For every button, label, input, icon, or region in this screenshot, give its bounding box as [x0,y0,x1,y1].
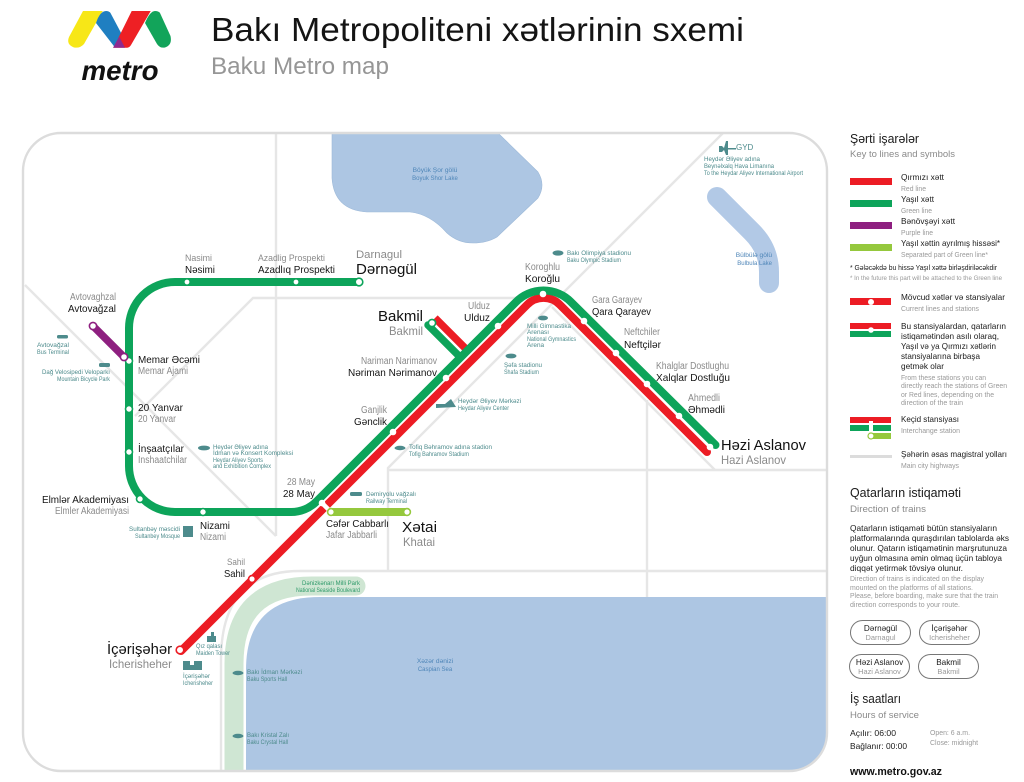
legend: main city highways [850,450,1007,470]
direction pill: Icherisheher: İçərişəhər [932,623,968,633]
landmark: Baku Sports Hall: Baku Sports Hall [247,676,287,683]
legend: green line: Yaşıl xətt [901,195,935,204]
legend: purple line: Purple line [901,228,933,237]
stations [89,278,713,654]
station: Bakmil: Bakmil [378,308,423,325]
legend: direct stations: From these stations you can [901,373,986,382]
landmark: Bus Terminal: Avtovağzal [37,342,69,349]
legend: current lines and stations: Current lines and stations [901,304,979,313]
legend: direct stations: istiqamətindən asılı olaraq, [901,332,999,341]
legend: current lines and stations [850,293,1005,313]
legend: main city highways: Şəhərin əsas magistral yolları [901,450,1007,459]
station: Ulduz: Ulduz [464,312,490,324]
landmark: Heydar Aliyev Center [436,398,521,412]
landmark: Maiden Tower: Qız qalası [196,643,222,650]
landmark: Railway Terminal: Dəmiryolu vağzalı [366,491,416,498]
landmark: Baku Crystal Hall [232,732,289,746]
direction text: Azerbaijani [850,524,1009,573]
direction pill: Icherisheher: Icherisheher [929,633,970,642]
station: 20 Yanvar [138,402,183,425]
line: red Bakmil branch [435,318,468,351]
station: Khalglar Dostlughu [656,361,730,384]
landmark: Bulbula lake label [736,252,773,267]
station: 28 May: 28 May [283,488,316,500]
line: purple [93,326,125,358]
logo: Baku Metro: metro [82,55,158,86]
hours heading: İş saatları [850,691,901,706]
legend: red line: Qırmızı xətt [901,173,945,182]
park: National Seaside Boulevard [234,586,356,782]
landmark: Sports and Exhibition Complex: Heydər Əliyev adına [213,444,268,451]
landmark: Railway Terminal [350,491,416,505]
station: Ganjlik: Gənclik [354,416,388,428]
landmark: Tofig Bahramov Stadium: Tofig Bahramov Stadium [409,451,469,458]
station: Memar Ajami: Memar Ajami [138,366,188,377]
station: Elmler Akademiyasi [42,494,129,517]
city highways [25,133,830,775]
website: www.metro.gov.az [849,766,942,778]
map frame [23,133,827,771]
station: Koroglu: Koroghlu [525,262,560,273]
landmark: Bulbula lake label: Bulbula Lake [737,261,773,267]
station: Khatai: Khatai [403,535,435,549]
direction text: English [850,574,998,609]
landmark: Sports and Exhibition Complex: and Exhibition Complex [213,463,272,470]
station: Avtovagzal: Avtovağzal [68,303,116,315]
legend: current lines and stations: Mövcud xətlər və stansiyalar [901,293,1005,302]
landmark: Boyuk Shor lake label: Boyuk Shor Lake [412,176,459,182]
landmark: airport: GYD [736,143,754,152]
hours: Azerbaijani: Açılır: 06:00 [850,729,896,738]
station: Khatai: Xətai [402,519,437,536]
Caspian Sea label [417,658,454,673]
landmark: Mountain Bicycle Park: Dağ Velosipedi Veloparkı [42,369,110,376]
direction heading: Direction of trains [850,504,926,515]
landmark: Baku Crystal Hall: Baku Crystal Hall [247,739,288,746]
landmark: Icherisheher old city: İçərişəhər [183,671,211,680]
logo: Baku Metro [68,11,171,86]
legend: red line [850,173,945,193]
station: Elmler Akademiyasi: Elmler Akademiyasi [55,506,129,517]
landmark: Maiden Tower [196,632,231,657]
landmark: Sultanbey Mosque: Sultanbəy məscidi [129,526,180,533]
legend: footnote: * Gələcəkdə bu hissə Yaşıl xəttə birləşdiriləcəkdir [850,263,998,272]
station: Koroglu [525,262,560,285]
station: Icherisheher: Icherisheher [109,657,172,671]
landmark: Sports and Exhibition Complex [198,444,293,470]
station: Jafar Jabbarli [326,518,389,541]
station: Gara Garayev: Qara Qarayev [592,306,652,318]
direction text: English: mounted on the platforms of all stations. [850,583,973,592]
landmark: Icherisheher old city: Icherisheher [183,680,214,687]
landmark: airport: Heydər Əliyev adına [704,156,760,163]
landmark: Sports and Exhibition Complex: İdman və Konsert Kompleksi [213,448,293,457]
legend: direct stations: stansiyalarına birbaşa [901,352,980,361]
landmark: Heydar Aliyev Center: Heydər Əliyev Mərkəzi [458,398,521,405]
station: Avtovagzal [68,292,116,315]
station: Icherisheher [107,640,172,671]
legend: separated green line: Separated part of Green line* [901,250,988,259]
landmark: Tofig Bahramov Stadium: Tofiq Bəhramov adına stadion [409,444,492,451]
park label: Dənizkənarı Milli Park [302,580,361,587]
station: Nizami: Nizami [200,520,230,532]
station: Neftchiler: Neftçilər [624,339,661,351]
legend: purple line: Bənövşəyi xətt [901,217,956,226]
legend: direct stations: or Red lines, depending on the [901,390,994,399]
station: Memar Ajami [138,354,200,377]
station: Nesimi: Nəsimi [185,264,215,276]
legend: direct stations: Yaşıl və ya Qırmızı xətlərin [901,342,996,351]
station: Dernegul: Dərnəgül [356,261,417,278]
station: Memar Ajami: Memar Əcəmi [138,354,200,366]
landmark: Shafa Stadium: Shafa Stadium [504,369,539,376]
hours: English: Close: midnight [930,738,978,747]
landmark: Sultanbey Mosque [129,526,193,540]
legend: green line: Green line [901,206,932,215]
station: Azadliq Prospekti [258,253,335,276]
direction heading: Qatarların istiqaməti [850,485,961,500]
direction heading [850,485,961,515]
station: Nariman Narimanov: Nariman Narimanov [361,356,437,367]
hours heading [850,691,919,721]
station: Azadliq Prospekti: Azadlig Prospekti [258,253,325,263]
direction pill: Dernegul: Dərnəgül [864,624,897,633]
panel: hours of service [849,691,978,778]
sea: Caspian [246,597,840,782]
legend heading [850,131,955,160]
station: Nesimi: Nasimi [185,253,212,263]
direction text: English: direction corresponds to your route. [850,600,960,609]
station: Koroglu: Koroğlu [525,273,560,285]
line: green main [129,282,716,512]
landmark: Baku Sports Hall: Bakı İdman Mərkəzi [247,667,302,676]
legend: interchange station: Interchange station [901,426,960,435]
landmark: Railway Terminal: Railway Terminal [366,498,407,505]
landmark: airport [704,141,803,177]
station: 20 Yanvar: 20 Yanvar [138,414,177,425]
landmark: Boyuk Shor lake label [412,167,459,182]
panel: direction of trains [850,485,1009,678]
station: Gara Garayev: Gara Garayev [592,295,642,306]
landmark: National Gymnastics Arena [527,316,576,349]
lake: Bulbula [717,197,769,283]
landmark: Shafa Stadium [504,354,542,376]
station: Neftchiler [624,327,661,351]
station: Nariman Narimanov [348,356,438,379]
panel: legend [850,131,1007,470]
landmark: Bus Terminal [37,335,69,356]
direction pill: Bakmil [918,654,978,678]
hours: English: Open: 6 a.m. [930,728,970,737]
landmark: Mountain Bicycle Park: Mountain Bicycle Park [57,376,111,383]
legend: green line [850,195,935,215]
station: Gara Garayev [592,295,652,318]
landmark: Bus Terminal: Bus Terminal [37,349,69,356]
hours: Azerbaijani: Bağlanır: 00:00 [850,742,907,751]
station: Ganjlik: Ganjlik [361,405,388,416]
direction text: English: Please, before boarding, make sure that the train [850,591,998,600]
landmark: Tofig Bahramov Stadium [394,444,492,458]
station: 28 May [283,477,316,500]
legend: direct stations: Bu stansiyalardan, qatarların [901,322,1006,331]
hours: Azerbaijani [850,729,907,751]
station: Dernegul [356,249,417,278]
station: Inshaatchilar [138,442,188,466]
legend: interchange station: Keçid stansiyası [901,415,959,424]
landmark: Sports and Exhibition Complex: Heydar Aliyev Sports [213,457,263,464]
legend: direct stations: getmək olar [901,362,944,371]
station: Nizami [200,520,230,543]
landmark: Sultanbey Mosque: Sultanbey Mosque [135,533,180,540]
landmark: Baku Olympic Stadium: Bakı Olimpiya stadionu [567,250,631,257]
direction text: Azerbaijani: platformalarında quraşdırılan tablolarda əks [850,534,1009,543]
station: Avtovagzal: Avtovaghzal [70,292,116,303]
legend: separated green line [850,239,1001,259]
station: Dernegul: Darnagul [356,249,402,261]
station: Sahil: Sahil [224,568,245,580]
station: Ahmedli: Əhmədli [688,404,725,416]
station: Khatai [402,519,437,549]
legend: separated green line: Yaşıl xəttin ayrılmış hissəsi* [901,239,1001,248]
station: 20 Yanvar: 20 Yanvar [138,402,183,414]
station: Nariman Narimanov: Nəriman Nərimanov [348,367,438,379]
landmark: Mountain Bicycle Park [42,363,111,383]
park label [296,580,361,594]
landmark: Baku Olympic Stadium [552,250,631,264]
landmark: Boyuk Shor lake label: Böyük Şor gölü [413,167,458,174]
station: Elmler Akademiyasi: Elmlər Akademiyası [42,494,129,506]
subtitle: Baku Metro map [211,53,389,80]
direction pill: Hazi Aslanov: Hazi Aslanov [858,667,901,676]
station: Icherisheher: İçərişəhər [107,640,172,658]
legend: interchange station [850,415,960,439]
station: Jafar Jabbarli: Jafar Jabbarli [326,530,377,541]
landmark: Heydar Aliyev Center: Heydar Aliyev Center [458,405,510,412]
landmark: National Gymnastics Arena: Arenası [527,329,549,336]
direction pill: Dernegul [850,620,910,644]
station: Sahil: Sahil [227,557,245,568]
hours: English [930,728,978,747]
legend: footnote [850,263,1002,282]
legend heading: Şərti işarələr [850,131,920,146]
landmark: airport: Beynəlxalq Hava Limanına [704,163,774,170]
legend: red line: Red line [901,184,926,193]
direction text: Azerbaijani: diqqət yetirmək tövsiyə olunur. [850,564,963,573]
station: Khalglar Dostlughu: Khalglar Dostlughu [656,361,729,372]
water and park areas [25,133,840,782]
station: Ulduz [464,301,490,324]
Caspian Sea label: Xəzər dənizi [417,658,454,665]
crossing: 28 May [321,502,331,512]
landmark: airport: To the Heydar Aliyev International Airport [704,170,803,177]
landmark: Baku Olympic Stadium: Baku Olympic Stadium [567,257,621,264]
landmark: Bulbula lake label: Bülbülə gölü [736,252,772,259]
legend: main city highways: Main city highways [901,461,959,470]
station: Ahmedli: Ahmedli [688,393,720,404]
landmark: National Gymnastics Arena: Milli Gimnastika [527,323,571,330]
legend heading: Key to lines and symbols [850,149,955,160]
station: Inshaatchilar: İnşaatçılar [138,442,184,455]
title: Bakı Metropoliteni xətlərinin sxemi [211,11,744,48]
park label: National Seaside Boulevard [296,587,360,594]
station: Inshaatchilar: Inshaatchilar [138,455,188,466]
direction text: English: Direction of trains is indicated on the display [850,574,984,583]
direction text: Azerbaijani: uyğun olmasına əmin olmaq üçün tabloya [850,554,1002,563]
station: Azadliq Prospekti: Azadlıq Prospekti [258,264,335,276]
direction pill: Bakmil: Bakmil [937,667,960,676]
icon: plane [719,141,736,155]
line: red main [181,298,707,651]
landmark: Baku Sports Hall [232,667,302,683]
station: Jafar Jabbarli: Cəfər Cabbarlı [326,518,389,530]
station: Nizami: Nizami [200,532,226,543]
hours heading: Hours of service [850,710,919,721]
station: Khalglar Dostlughu: Xalqlar Dostluğu [656,372,730,384]
Caspian Sea label: Caspian Sea [418,667,453,673]
station: Hazi Aslanov: Həzi Aslanov [721,437,806,454]
landmark: Icherisheher old city [183,661,214,687]
landmark: Maiden Tower: Maiden Tower [196,650,231,657]
legend: footnote: * In the future this part will be attached to the Green line [850,275,1002,282]
station: Bakmil [378,308,423,338]
legend: direct stations [850,322,1007,407]
station: Ulduz: Ulduz [468,301,490,312]
line: green Bakmil branch [428,325,460,357]
legend: direct stations: direction of the train [901,398,963,407]
direction pill: Bakmil: Bakmil [936,658,961,667]
landmark: National Gymnastics Arena: National Gymnastics [527,336,576,343]
direction text: Azerbaijani: Qatarların istiqaməti bütün stansiyaların [850,524,997,533]
line: separated green (Xetai) [331,508,407,516]
station: Ahmedli [688,393,725,416]
station: Hazi Aslanov [721,437,806,467]
direction pill: Icherisheher [920,620,980,644]
direction pill: Dernegul: Darnagul [866,633,896,642]
landmark: National Gymnastics Arena: Arena [527,342,544,349]
landmark: Baku Crystal Hall: Bakı Kristal Zalı [247,732,289,739]
legend: direct stations: directly reach the stations of Green [901,381,1007,390]
legend: purple line [850,217,956,237]
direction pill: Hazi Aslanov: Həzi Aslanov [856,658,904,667]
direction text: Azerbaijani: olunur. Qatarın istiqamətinin marşrutunuza [850,544,1007,553]
station: Sahil [224,557,245,580]
station: Neftchiler: Neftchiler [624,327,661,338]
landmark: Shafa Stadium: Şəfa stadionu [504,362,542,369]
station: Nesimi [185,253,215,276]
station: Bakmil: Bakmil [389,324,423,338]
station: Ganjlik [354,405,388,428]
station: Hazi Aslanov: Hazi Aslanov [721,453,786,467]
station: 28 May: 28 May [287,477,315,488]
panel: map [23,133,840,782]
direction pill: Hazi Aslanov [850,654,910,678]
lake: Boyuk Shor [332,133,542,243]
